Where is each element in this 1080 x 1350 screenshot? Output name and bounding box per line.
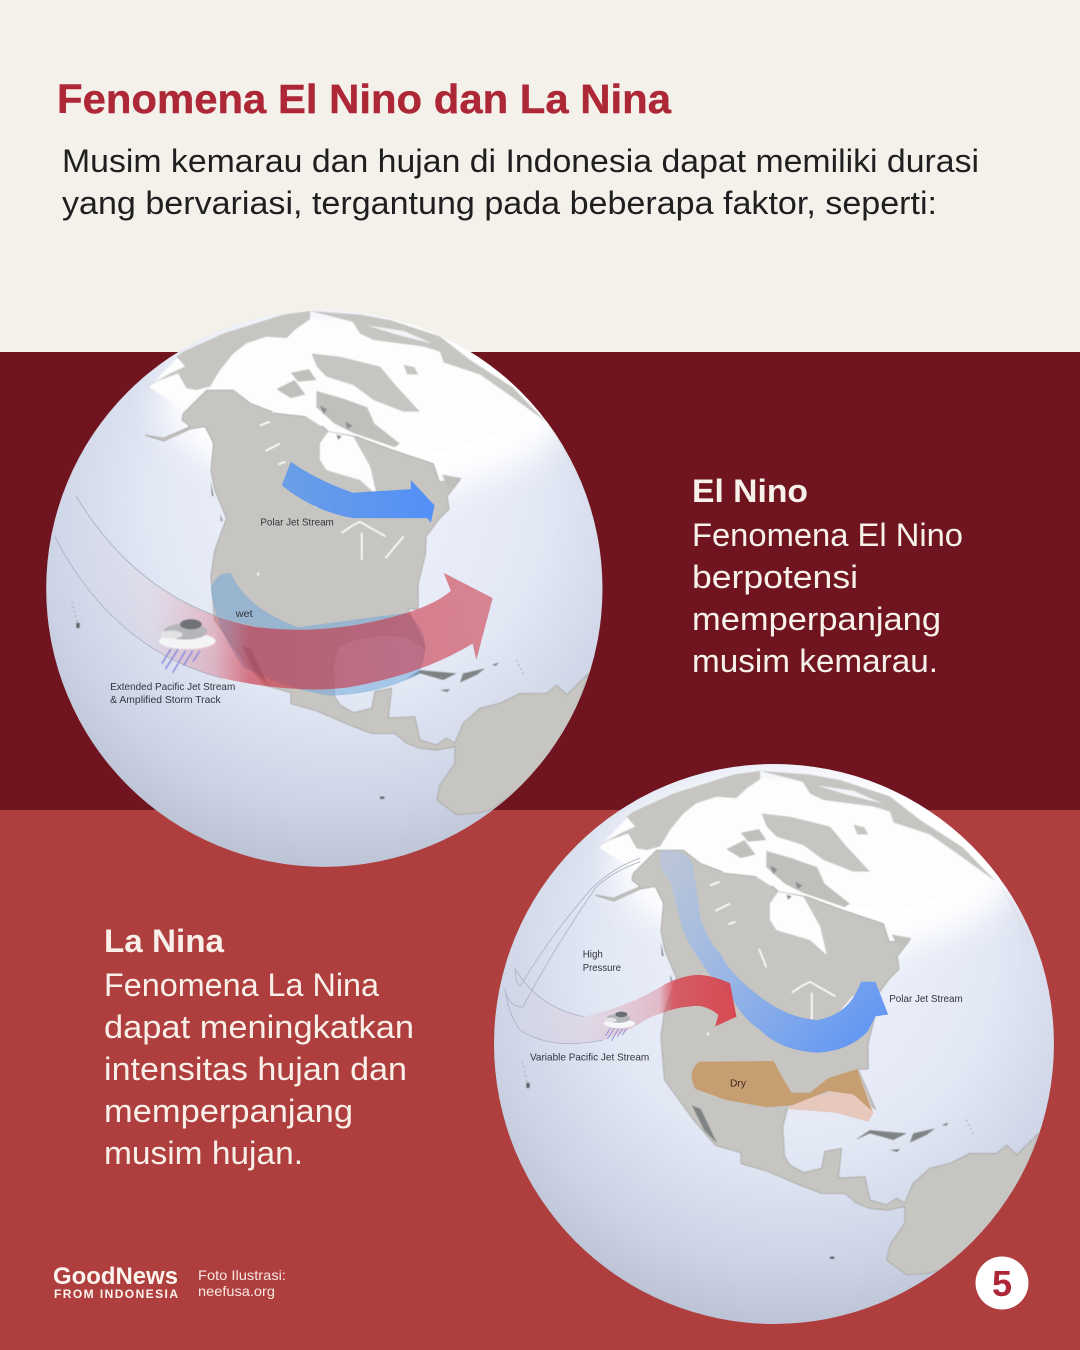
logo: GoodNews from Indonesia: FROM INDONESIA [54, 1287, 178, 1301]
text block: La Nina: memperpanjang [104, 1093, 353, 1129]
text block: El Nino: memperpanjang [692, 601, 941, 637]
dry region [788, 1069, 874, 1122]
intro text: Musim kemarau dan hujan di Indonesia dapat memiliki durasi [62, 143, 979, 179]
globe: El Nino map [46, 307, 602, 867]
panel: El Nino [0, 352, 1080, 810]
text block: La Nina: musim hujan. [104, 1135, 303, 1171]
text block: La Nina: La Nina [104, 923, 224, 959]
text block: El Nino: Fenomena El Nino [692, 517, 963, 553]
background: cream header [0, 0, 1080, 352]
icon: storm cloud [159, 619, 216, 673]
text block: La Nina: Fenomena La Nina [104, 967, 379, 1003]
intro text: yang bervariasi, tergantung pada beberapa faktor, seperti: [62, 185, 937, 221]
jet stream edge lines [55, 496, 258, 678]
photo credit: Foto Ilustrasi: [198, 1267, 286, 1283]
land masses [72, 307, 600, 815]
photo credit: neefusa.org [198, 1283, 275, 1299]
map labels: Dry [730, 1079, 746, 1090]
Pacific jet arrow [152, 572, 493, 690]
map labels: Polar Jet Stream [260, 517, 334, 528]
intro text [62, 143, 979, 221]
map labels: Polar Jet Stream [889, 994, 963, 1005]
map labels [110, 517, 334, 706]
map labels: wet [234, 609, 253, 620]
page number badge [976, 1256, 1028, 1310]
title: Fenomena El Nino dan La Nina [57, 76, 672, 122]
logo: GoodNews from Indonesia: GoodNews [53, 1263, 178, 1290]
text block: El Nino [692, 473, 963, 679]
jet stream edge lines [505, 858, 640, 1044]
polar jet arrow [282, 462, 435, 523]
land masses [522, 767, 1050, 1275]
text block: El Nino: musim kemarau. [692, 643, 938, 679]
globe: La Nina map [494, 764, 1054, 1324]
map labels: Variable Pacific Jet Stream [530, 1052, 649, 1063]
wet region [211, 573, 425, 696]
panel: La Nina [0, 810, 1080, 1350]
page number badge: 5 [992, 1263, 1012, 1304]
map labels: & Amplified Storm Track [110, 695, 221, 706]
map labels: Pressure [583, 963, 621, 974]
text block: La Nina: intensitas hujan dan [104, 1051, 407, 1087]
text block: La Nina [104, 923, 414, 1171]
icon: storm cloud [604, 1012, 635, 1041]
polar jet arrow [660, 850, 888, 1053]
text block: La Nina: dapat meningkatkan [104, 1009, 414, 1045]
map labels [530, 949, 963, 1090]
Pacific jet arrow [562, 974, 736, 1043]
text block: El Nino: El Nino [692, 473, 808, 509]
map labels: High [583, 949, 603, 960]
photo credit [198, 1267, 286, 1299]
map labels: Extended Pacific Jet Stream [110, 682, 235, 693]
text block: El Nino: berpotensi [692, 559, 858, 595]
